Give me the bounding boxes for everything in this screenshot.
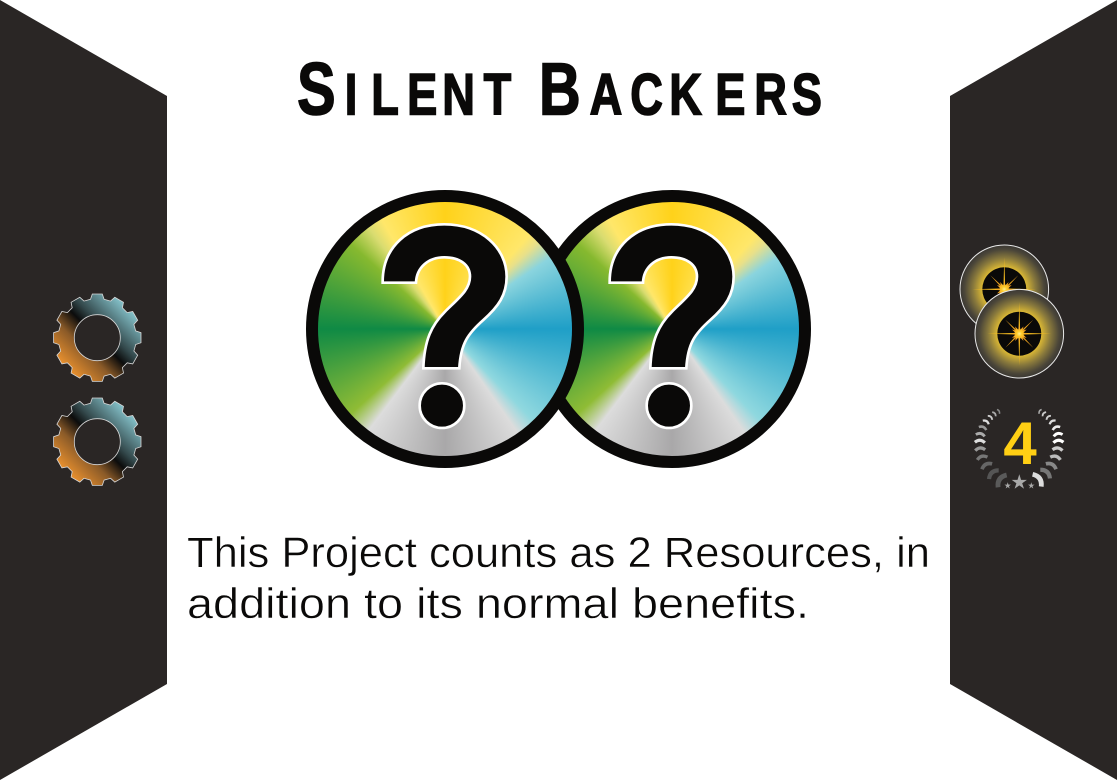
title: ACKERS	[590, 63, 822, 128]
wreath stars	[1004, 474, 1035, 489]
panel: right dark side	[950, 0, 1117, 780]
title: S	[297, 49, 336, 131]
text block: rule text: This Project counts as 2 Resources, in	[187, 529, 930, 577]
text block: rule text: addition to its normal benefits.	[187, 580, 809, 628]
icon: left question disc	[306, 190, 584, 468]
icon: gear 2	[54, 398, 141, 485]
panel: left dark side	[0, 0, 167, 780]
title: ILENT	[345, 63, 511, 128]
icon: gear 1	[54, 294, 141, 381]
title: B	[539, 49, 581, 131]
icon: pair of question mark discs	[306, 190, 811, 468]
title	[297, 49, 822, 131]
icon: back coin	[960, 245, 1049, 334]
icon: laurel wreath with number 4	[974, 408, 1064, 489]
number 4: 4	[1003, 410, 1037, 477]
icon: front coin	[975, 289, 1064, 378]
icons: star coins	[960, 244, 1064, 378]
wreath left side	[975, 409, 1007, 487]
text block: rule text	[187, 529, 930, 628]
wreath right side	[1033, 409, 1063, 487]
icons: gears	[53, 294, 142, 486]
icon: right question disc	[533, 190, 811, 468]
